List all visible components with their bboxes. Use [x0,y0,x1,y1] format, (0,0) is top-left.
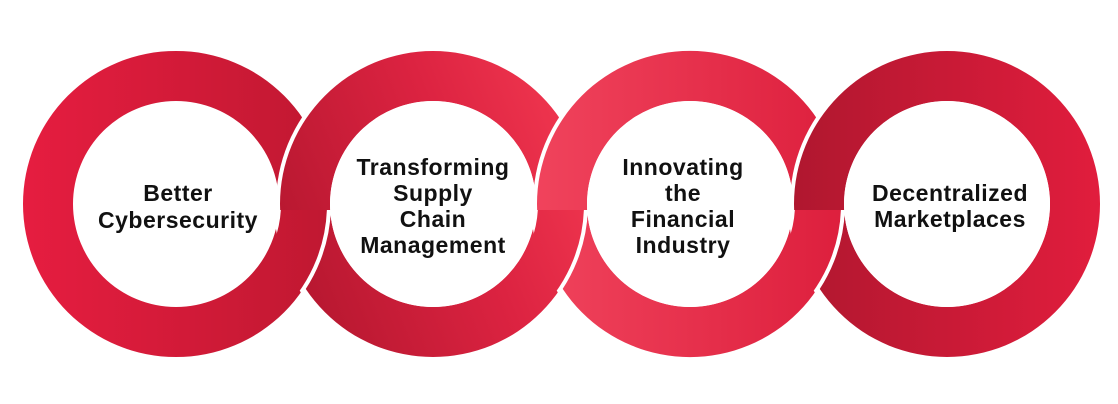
ring 1: Better Cybersecurity [19,47,333,361]
label: Decentralized Marketplaces: Marketplaces [874,206,1026,232]
label: Transforming Supply Chain Management: Transforming [357,154,509,180]
label: Transforming Supply Chain Management: Chain [400,206,466,232]
ring 2: Transforming Supply Chain Management [276,47,590,361]
label: Innovating the Financial Industry: the [665,180,701,206]
label: Innovating the Financial Industry: Financial [631,206,735,232]
ring 1 interlock overlap [276,210,330,292]
label: Better Cybersecurity: Cybersecurity [98,207,258,233]
label: Innovating the Financial Industry: Industry [636,232,730,258]
ring 2 interlock overlap [533,210,588,292]
ring 3: Innovating the Financial Industry [533,47,847,361]
ring 3 interlock overlap [790,210,844,292]
label: Decentralized Marketplaces: Decentralized [872,180,1028,206]
label: Transforming Supply Chain Management: Management [360,232,506,258]
label: Better Cybersecurity: Better [143,180,213,206]
label: Innovating the Financial Industry: Innovating [622,154,744,180]
label: Transforming Supply Chain Management: Supply [393,180,473,206]
ring 4: Decentralized Marketplaces [790,47,1104,361]
